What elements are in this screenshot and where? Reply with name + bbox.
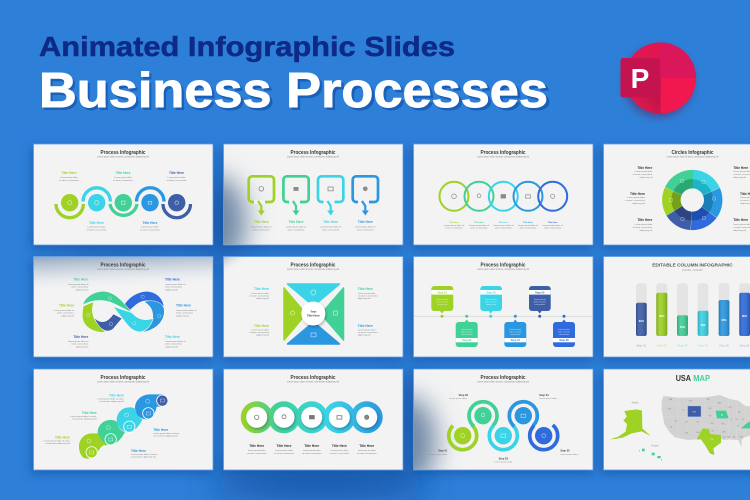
arrow box 2 [283,176,309,216]
labels: amet, consectetur [287,228,305,232]
labels: Lorem ipsum dolor [627,197,645,199]
labels: Title Here [73,335,88,339]
labels: amet, consectetur [165,343,182,346]
state abbreviations: AR [722,430,726,433]
step 03 card: Step 03 [486,290,496,294]
labels: Lorem ipsum dolor sit amet, [153,432,180,435]
panel: column chart: EXCEL CHART [682,268,703,272]
step 01 card [431,286,453,318]
labels: Lorem ipsum dolor [635,171,653,173]
labels [429,393,578,464]
labels: Title Here [498,221,509,224]
step 06 card: Lorem ipsum [558,329,570,331]
Hawaii [639,446,662,460]
icon: PowerPoint logo [620,42,696,114]
state abbreviations: NM [696,432,700,434]
map title: MAP [693,374,711,383]
labels: sit amet, consectetur [167,179,187,182]
ring centers [454,407,552,444]
labels: Title Here [116,171,131,175]
state abbreviations: WI [729,407,732,409]
panel: four-way square: Process Infographic [290,262,336,268]
infinity shape [82,291,164,332]
labels: Lorem ipsum dolor [251,293,269,295]
panel: swirl staircase: Process Infographic [100,375,146,381]
labels: sit amet, consectetur [87,228,107,231]
labels: Lorem ipsum dolor [275,450,293,452]
labels: sit amet, consectetur [59,179,79,182]
step 01 card: consectetur [437,303,448,306]
labels: sit amet, consectetur [358,331,378,334]
ring icons [452,194,555,199]
column labels: Step 02 [657,344,667,348]
heading: Business Processes: Business Processes [41,66,551,120]
state abbreviations: TX [710,439,714,441]
heading: Animated Infographic Slides: Animated Infographic Slides [39,31,455,62]
swirl small circles [86,395,168,458]
labels: Lorem ipsum dolor [248,450,266,452]
labels: adipiscing elit [256,297,269,300]
labels: Lorem ipsum dolor [429,453,447,456]
open ring arcs [443,396,563,455]
labels: Title Here [254,220,269,224]
panel: gradient band circles: Process Infographic [290,375,336,381]
panel: infinity loop [34,256,213,357]
panel: square arrows [223,144,404,246]
state abbreviations: WA [669,398,673,401]
state abbreviations: NE [708,416,712,418]
labels: adipiscing elit [632,202,645,205]
state abbreviations: IN [736,419,738,421]
panel: wave process [34,144,213,245]
labels: Title Here [89,221,104,225]
center circle [301,302,325,326]
panel: square arrows: Lorem ipsum dolor sit amet, consectetur adipiscing elit [287,156,339,158]
icons [255,415,369,419]
labels: Title Here [254,324,269,328]
labels: Lorem ipsum dolor [60,177,78,179]
labels: amet, consectetur [357,228,374,232]
labels: Title Here [637,166,652,170]
labels: Step 04 [539,393,549,397]
labels: Lorem ipsum dolor [358,330,376,332]
arrow box 4 [353,176,378,216]
labels: Lorem ipsum dolor sit [320,226,341,228]
column values: 80% [659,314,665,318]
state abbreviations: IA [721,413,724,416]
labels: Title Here [62,171,77,175]
column tracks [636,283,750,336]
step 05 card: Step 05 [535,290,545,294]
labels: Lorem ipsum dolor sit [165,283,186,286]
column labels: Step 01 [636,344,647,348]
wave arcs [56,188,190,218]
labels: Lorem ipsum dolor sit [286,226,307,228]
panel: gradient band circles [224,369,403,470]
panel: USA map [604,369,750,470]
state abbreviations: MS [727,436,731,438]
labels: Lorem ipsum dolor [88,226,106,228]
labels: sit amet, consectetur [625,199,645,202]
labels: Lorem ipsum dolor [358,450,376,452]
process circles [61,194,185,211]
labels: Lorem ipsum dolor sit [493,224,514,227]
step 01 card: Step 01 [438,290,447,294]
labels: Lorem ipsum dolor [251,330,269,332]
step 04 card [504,315,526,347]
labels [247,444,377,455]
labels: Title Here [323,220,338,224]
labels: amet, consectetur [57,312,74,315]
Alaska [610,401,651,439]
step 05 card [529,286,551,318]
column labels: Step 05 [719,344,729,348]
labels: amet, consectetur [544,226,561,230]
labels: sit amet, consectetur [140,228,160,231]
labels: Title Here [59,304,74,308]
labels: Title Here [358,287,373,291]
state abbreviations: KY [737,426,740,428]
labels: Title Here [637,218,652,222]
labels: Title Here [289,220,304,224]
icon: PowerPoint logo: P [631,63,649,94]
center circle: Title Here [307,314,320,318]
labels: Lorem ipsum dolor sit [469,224,490,227]
step 06 card: dolor sit amet [558,330,570,334]
labels: Lorem ipsum dolor [560,453,578,456]
step 03 card [480,286,502,318]
labels: amet, consectetur [495,226,512,230]
panel: interlocking rings [414,144,593,245]
column values [639,314,748,329]
state abbreviations: ID [682,410,685,412]
labels: Title Here [153,428,168,432]
state abbreviations: MN [718,402,721,404]
labels: Title Here [165,335,180,339]
labels [54,278,197,348]
panel: four-way square [224,256,403,357]
state abbreviations: OH [741,419,745,421]
labels: Title Here [548,221,558,224]
labels: sit amet, consectetur [357,452,377,455]
state abbreviations: GA [739,435,743,438]
labels: Lorem ipsum dolor [635,224,653,226]
labels: adipiscing elit [75,288,89,291]
gradient rings [241,401,383,433]
labels: sit amet, consectetur [274,452,294,455]
labels: Lorem ipsum dolor [449,397,467,400]
state abbreviations: AZ [685,431,689,434]
labels: Title Here [630,192,645,196]
panel: open rings: Lorem ipsum dolor sit amet, consectetur adipiscing elit [477,380,529,384]
labels: adipiscing elit [165,288,178,291]
labels: amet, consectetur [322,228,339,232]
state abbreviations: CA [669,425,673,428]
labels: sit amet, consectetur [113,179,133,182]
heading: Business Processes: Business Processes [39,64,548,118]
labels: Lorem ipsum dolor sit [68,340,89,343]
column labels [636,344,750,348]
rings [440,182,567,211]
center circle: Your [310,310,317,314]
labels: Lorem ipsum dolor [494,460,513,464]
labels: adipiscing elit [75,345,89,348]
labels: amet, consectetur [470,226,488,230]
labels: consectetur adipiscing elit [99,400,124,403]
arrow box 3 [318,176,343,216]
labels: Step 01 [438,449,448,453]
step 02 card: Lorem ipsum [461,329,473,331]
panel: wave process: Process Infographic [100,150,146,156]
column bars [636,293,750,336]
donut chart [657,164,728,236]
labels: Lorem ipsum dolor sit amet, [70,415,97,418]
column values: 65% [721,318,727,322]
panel: timeline steps: Process Infographic [480,262,526,268]
labels: Lorem ipsum dolor sit [68,283,89,286]
labels: amet, consectetur [519,226,537,230]
US map [610,395,750,460]
panel: circles infographic: Circles Infographic [672,150,714,156]
map title [676,374,711,383]
labels [44,394,180,458]
labels: adipiscing elit [256,334,269,336]
labels: adipiscing elit [358,297,371,300]
Alaska: Alaska [631,401,639,404]
labels: Title Here [523,221,534,224]
labels: Lorem ipsum dolor sit [518,224,539,227]
column labels: Step 03 [678,344,688,348]
labels: adipiscing elit [733,176,747,179]
panel: column chart: EDITABLE COLUMN INFOGRAPHIC [652,262,733,267]
labels: Title Here [733,218,748,222]
column values: 40% [700,323,706,327]
labels: amet, consectetur [71,343,89,346]
panel: open rings: Process Infographic [480,375,526,381]
step 06 card [553,315,575,347]
labels: adipiscing elit [358,334,371,336]
state abbreviations: LA [723,435,726,438]
state abbreviations: ND [707,399,710,401]
step 02 card: consectetur [462,333,472,336]
labels: Title Here [332,444,347,448]
labels: Title Here [733,166,748,170]
step 06 card: Step 06 [559,338,569,342]
labels: amet, consectetur [253,228,270,232]
labels: Title Here [82,411,97,415]
labels: Title Here [304,444,319,448]
panel: circles infographic [604,144,750,245]
labels: sit amet, consectetur [247,452,267,455]
map title: USA [676,374,691,383]
labels: Lorem ipsum dolor sit [542,224,563,227]
labels: Title Here [359,444,374,448]
labels: Lorem ipsum dolor [539,397,557,400]
state abbreviations: UT [685,421,689,423]
labels: Title Here [73,278,88,282]
labels: Lorem ipsum dolor sit [355,226,376,228]
panel: four-way square: Lorem ipsum dolor sit amet, consectetur adipiscing elit [287,268,339,271]
panel: infinity loop: Process Infographic [100,262,146,268]
labels [59,171,187,231]
labels: adipiscing elit [61,314,74,317]
white inner circles [246,407,377,428]
column labels: Step 04 [698,344,708,348]
arrow box 1 [249,176,274,216]
step 06 card: consectetur [559,333,570,336]
labels: Title Here [277,444,292,448]
panel: gradient band circles: Lorem ipsum dolor sit amet, consectetur adipiscing elit [287,380,339,384]
state abbreviations: AL [733,435,736,438]
labels: Lorem ipsum dolor sit [251,226,272,228]
labels: Title Here [254,287,269,291]
step 03 card: Lorem ipsum [485,299,497,301]
labels: Lorem ipsum dolor [330,450,348,452]
labels [249,287,378,336]
labels: sit amet, consectetur [633,173,653,176]
state abbreviations: CO [696,421,700,423]
labels: Title Here [249,444,264,448]
step 03 card: dolor sit amet [485,300,497,304]
labels: Lorem ipsum dolor sit [444,224,465,227]
labels: sit amet, consectetur [249,331,269,334]
labels: Lorem ipsum dolor [303,450,321,452]
step 04 card: dolor sit amet [509,330,522,334]
state abbreviations: MT [689,400,693,402]
labels: adipiscing elit [733,229,747,232]
labels: Step 03 [499,456,508,460]
labels: adipiscing elit [165,345,178,348]
labels: amet, consectetur [71,286,89,289]
panel: interlocking rings: Lorem ipsum dolor sit amet, consectetur adipiscing elit [477,156,529,158]
swirl icons [87,399,164,454]
step 05 card: dolor sit amet [534,300,546,304]
square segments [284,284,344,344]
step 02 card: dolor sit amet [461,330,473,334]
labels: Lorem ipsum dolor sit amet, [98,398,124,400]
labels [444,221,563,230]
labels [625,166,750,232]
highlighted states [688,406,750,455]
column values: 80% [742,314,748,318]
labels: amet, consectetur [165,286,182,289]
labels: Step 05 [560,449,570,453]
state abbreviations [668,398,745,441]
state abbreviations: OK [711,430,714,432]
panel: timeline steps [414,256,593,357]
labels: Lorem ipsum dolor [358,293,376,295]
labels: Lorem ipsum dolor sit amet, [44,440,70,442]
labels: adipiscing elit [639,229,653,232]
labels: consectetur adipiscing elit [131,456,156,458]
step 01 card: dolor sit amet [436,300,449,304]
panel: square arrows: Process Infographic [290,150,336,156]
panel: open rings [413,368,594,470]
step 05 card: consectetur [535,303,545,306]
step 04 card: Step 04 [511,338,520,342]
state abbreviations: OR [668,409,671,411]
labels: sit amet, consectetur [358,294,378,298]
labels: Title Here [474,221,485,224]
labels: Title Here [449,221,460,224]
labels: Lorem ipsum dolor sit [54,309,74,312]
labels: Lorem ipsum dolor sit [176,309,197,312]
panel: swirl staircase: Lorem ipsum dolor sit amet, consectetur adipiscing elit [97,380,149,384]
labels: Lorem ipsum dolor [168,177,186,179]
state abbreviations: NV [674,421,678,423]
labels: Step 02 [459,393,468,397]
labels: Title Here [165,278,180,282]
labels: adipiscing elit [639,176,653,179]
panel: column chart [604,256,750,357]
panel: circles infographic: Lorem ipsum dolor sit amet, consectetur adipiscing elit [666,156,719,158]
state abbreviations: IL [731,419,733,421]
state abbreviations: MO [722,423,725,425]
labels: Lorem ipsum dolor sit [165,340,186,343]
column values: 60% [639,319,645,323]
labels: Title Here [358,220,373,224]
panel: interlocking rings: Process Infographic [480,150,526,156]
labels: Title Here [109,394,124,398]
step 04 card: Lorem ipsum [510,329,521,331]
labels: sit amet, consectetur [329,452,349,455]
labels: Title Here [55,436,70,440]
state abbreviations: WY [693,411,697,413]
labels: adipiscing elit [176,314,189,317]
labels: sit amet, consectetur [249,294,269,298]
labels: Lorem ipsum dolor sit amet, [131,453,158,456]
panel: timeline steps: Lorem ipsum dolor sit amet, consectetur adipiscing elit [477,268,529,271]
labels: Title Here [169,171,184,175]
step 02 card: Step 02 [462,338,472,342]
labels: Title Here [358,324,373,328]
labels: Title Here [176,304,191,308]
labels [251,220,376,232]
swirl shapes [79,394,168,459]
labels: Title Here [131,449,146,453]
step 03 card: consectetur [486,303,497,306]
state abbreviations: SD [708,408,712,410]
labels: Lorem ipsum dolor [141,226,159,228]
step 05 card: Lorem ipsum [534,299,546,301]
labels: amet, consectetur [176,312,193,315]
column labels: Step 06 [740,344,750,348]
step 01 card: Lorem ipsum [437,299,448,301]
column values: 30% [680,325,686,329]
panel: infinity loop: Lorem ipsum dolor sit amet, consectetur adipiscing elit [97,268,149,271]
labels: Title Here [143,221,158,225]
labels: sit amet, consectetur [302,452,322,455]
labels: Lorem ipsum dolor [114,177,132,179]
panel: swirl staircase [34,369,213,470]
labels: amet, consectetur [445,226,463,230]
state abbreviations: KS [711,423,714,425]
Hawaii: Hawaii [651,446,659,448]
labels: sit amet, consectetur [633,226,653,229]
step 02 card [456,315,478,347]
labels: consectetur adipiscing elit [153,434,178,438]
panel: wave process: Lorem ipsum dolor sit amet, consectetur adipiscing elit [97,156,149,158]
labels: consectetur adipiscing elit [72,418,97,420]
labels: consectetur adipiscing elit [45,442,70,445]
step 04 card: consectetur [510,333,521,336]
state abbreviations: MI [738,411,741,413]
